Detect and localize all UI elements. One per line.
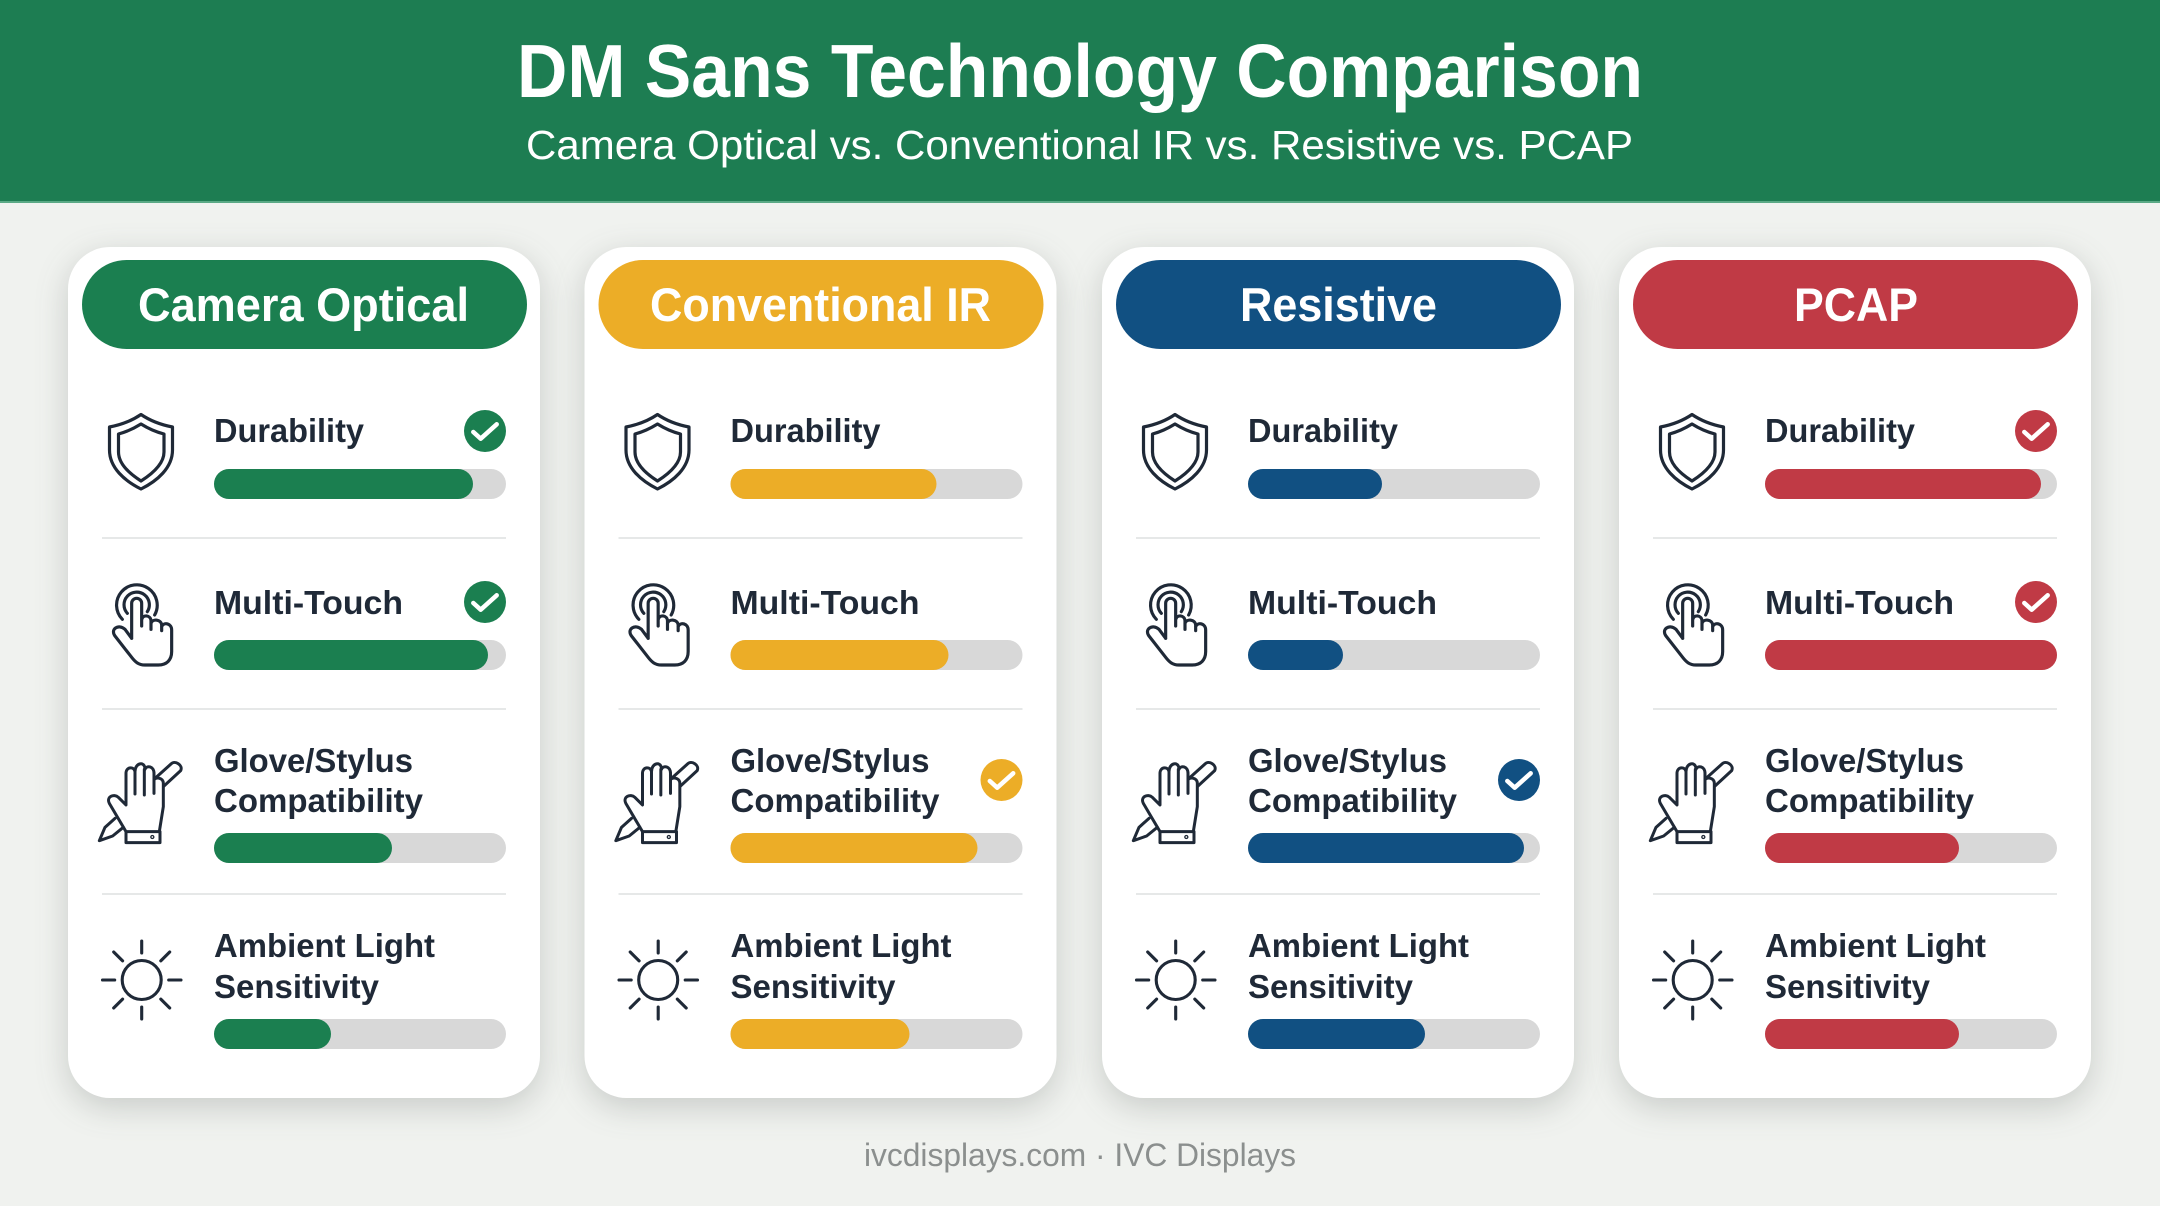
check badge [2015, 410, 2057, 452]
row: Glove/Stylus Compatibility: Glove/Stylus [730, 742, 930, 779]
row: Glove/Stylus Compatibility [616, 742, 1022, 863]
bar: Durability [730, 469, 1022, 499]
row: Multi-Touch [630, 584, 1022, 670]
row: Ambient Light Sensitivity: Ambient Light [1765, 927, 1986, 964]
row: Multi-Touch [1147, 584, 1540, 670]
panel: PCAP [1619, 247, 2091, 1098]
row: Glove/Stylus Compatibility: Compatibility [214, 782, 424, 819]
bar: Multi-Touch [730, 640, 1022, 670]
heading pill: Camera Optical [82, 260, 527, 349]
row: Glove/Stylus Compatibility [99, 742, 506, 863]
check badge [2015, 581, 2057, 623]
row: Ambient Light Sensitivity [102, 927, 506, 1049]
heading pill: PCAP: PCAP [1794, 278, 1918, 331]
row: Durability: Durability [1765, 412, 1916, 449]
bar: Glove/Stylus [1765, 833, 2057, 863]
row: Glove/Stylus Compatibility [1133, 742, 1540, 863]
bar: Durability [1248, 469, 1540, 499]
row: Ambient Light Sensitivity: Sensitivity [214, 968, 380, 1005]
row: Multi-Touch [113, 581, 506, 670]
row: Glove/Stylus Compatibility: Glove/Stylus [1765, 742, 1964, 779]
title: DM Sans Technology Comparison [517, 29, 1643, 113]
icon: sun [1654, 941, 1732, 1019]
row: Multi-Touch: Multi-Touch [214, 584, 403, 621]
heading pill: Conventional IR [598, 260, 1044, 349]
icon: sun [102, 941, 181, 1019]
icon: touch hand [1664, 585, 1723, 665]
check badge [464, 410, 506, 452]
bar: Durability [1765, 469, 2057, 499]
row: Glove/Stylus Compatibility: Compatibility [1248, 782, 1458, 819]
icon: sun [1136, 941, 1215, 1019]
bar: Durability [214, 469, 506, 499]
bar: Glove/Stylus [730, 833, 1022, 863]
row: Durability [1144, 412, 1540, 499]
panel: Resistive [1102, 247, 1574, 1098]
bar: Glove/Stylus [214, 833, 506, 863]
bar: Ambient Light [1248, 1019, 1540, 1049]
row: Glove/Stylus Compatibility: Compatibility [1765, 782, 1975, 819]
row: Ambient Light Sensitivity: Ambient Light [214, 927, 435, 964]
icon: shield [110, 414, 172, 489]
icon: sun [619, 941, 698, 1019]
bar: Multi-Touch [1248, 640, 1540, 670]
row: Durability: Durability [1248, 412, 1399, 449]
row: Ambient Light Sensitivity: Sensitivity [1248, 968, 1414, 1005]
icon: touch hand [1147, 585, 1206, 665]
row: Glove/Stylus Compatibility: Compatibility [730, 782, 940, 819]
bar: Multi-Touch [214, 640, 506, 670]
icon: touch hand [630, 585, 688, 665]
row: Ambient Light Sensitivity: Ambient Light [1248, 927, 1469, 964]
row: Durability [1660, 410, 2057, 499]
row: Ambient Light Sensitivity: Sensitivity [730, 968, 896, 1005]
heading pill: Conventional IR: Conventional IR [650, 278, 991, 331]
row: Multi-Touch [1664, 581, 2057, 670]
panel: Conventional IR [584, 247, 1056, 1098]
panel: Camera Optical [68, 247, 540, 1098]
icon: glove and stylus [616, 763, 698, 843]
row: Durability: Durability [730, 412, 881, 449]
bar: Ambient Light [1765, 1019, 2057, 1049]
icon: glove and stylus [1133, 763, 1215, 843]
row: Multi-Touch: Multi-Touch [1248, 584, 1437, 621]
icon: touch hand [113, 585, 172, 665]
row: Durability [626, 412, 1022, 499]
subtitle: Camera Optical vs. Conventional IR vs. Resistive vs. PCAP [526, 122, 1633, 168]
row: Glove/Stylus Compatibility: Glove/Stylus [1248, 742, 1447, 779]
row: Ambient Light Sensitivity: Ambient Light [730, 927, 952, 964]
icon: shield [1144, 414, 1206, 489]
heading pill: Resistive [1116, 260, 1561, 349]
check badge [980, 759, 1022, 801]
icon: shield [1660, 414, 1724, 489]
bar: Glove/Stylus [1248, 833, 1540, 863]
row: Ambient Light Sensitivity [619, 927, 1022, 1049]
row: Durability: Durability [214, 412, 365, 449]
footer credit: ivcdisplays.com · IVC Displays [864, 1137, 1296, 1173]
check badge [1498, 759, 1540, 801]
check badge [464, 581, 506, 623]
icon: shield [626, 414, 689, 489]
bar: Ambient Light [214, 1019, 506, 1049]
row: Glove/Stylus Compatibility: Glove/Stylus [214, 742, 413, 779]
icon: glove and stylus [99, 763, 181, 843]
row: Glove/Stylus Compatibility [1650, 742, 2057, 863]
row: Durability [110, 410, 506, 499]
header banner [0, 0, 2160, 203]
row: Ambient Light Sensitivity [1136, 927, 1540, 1049]
heading pill: Resistive: Resistive [1240, 278, 1437, 331]
heading pill: PCAP [1633, 260, 2078, 349]
bar: Multi-Touch [1765, 640, 2057, 670]
bar: Ambient Light [730, 1019, 1022, 1049]
icon: glove and stylus [1650, 763, 1732, 843]
row: Ambient Light Sensitivity [1654, 927, 2057, 1049]
row: Multi-Touch: Multi-Touch [1765, 584, 1954, 621]
row: Ambient Light Sensitivity: Sensitivity [1765, 968, 1931, 1005]
heading pill: Camera Optical: Camera Optical [138, 278, 469, 331]
row: Multi-Touch: Multi-Touch [730, 584, 920, 621]
